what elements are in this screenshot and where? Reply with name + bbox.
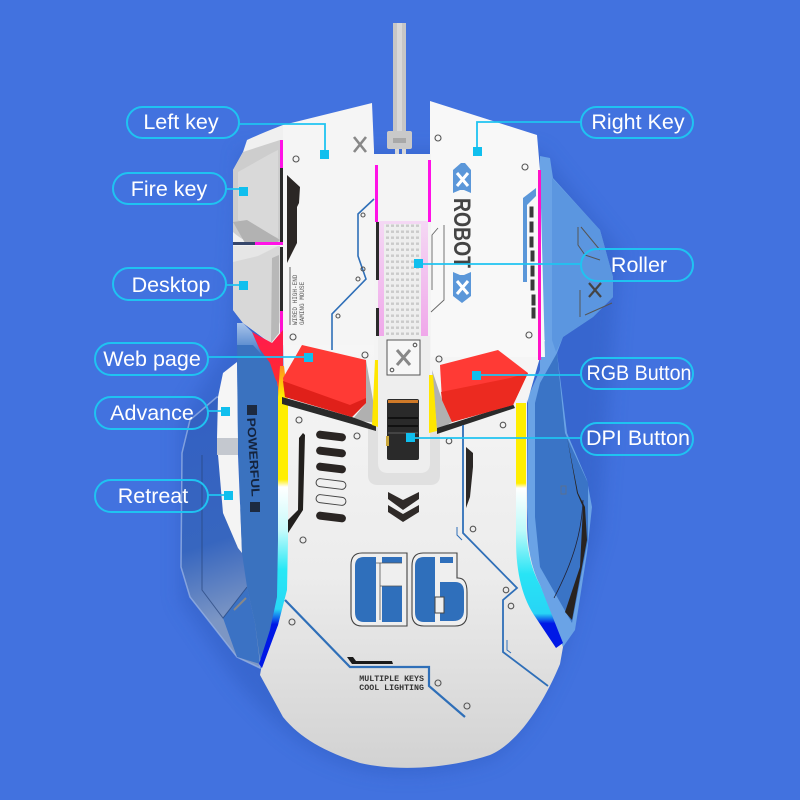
decal rule: [289, 267, 291, 325]
panel: red web page button: [282, 345, 378, 431]
vent slots: [316, 430, 346, 523]
centre DPI housing: [368, 336, 440, 485]
callout: Advance: [95, 397, 230, 429]
left key: [283, 103, 374, 345]
callout: Right Key: [473, 107, 693, 156]
blue circuit lines left key: [332, 199, 374, 350]
callout: Roller: [414, 249, 693, 281]
callout: DPI Button: [406, 423, 693, 455]
callout: Web page: Web page: [103, 347, 201, 371]
small text decal: WIRED HIGH-END: [292, 274, 299, 325]
left side upper shell: [233, 125, 283, 345]
panel: right RGB light strip: [516, 403, 563, 648]
POWERFUL X decal: [244, 405, 263, 512]
black decal left lower: [288, 433, 305, 533]
red left base: [252, 330, 283, 400]
right key: [430, 101, 545, 357]
panel: left blue strip: [237, 323, 278, 660]
blue circuit line lower left: [285, 600, 465, 717]
callout: Advance: Advance: [110, 401, 194, 425]
POWERFUL X decal: POWERFUL: [244, 417, 263, 497]
callout: Fire key: Fire key: [131, 177, 207, 201]
callout: Right Key: Right Key: [591, 110, 685, 134]
small text decal line two: GAMING MOUSE: [299, 281, 306, 325]
panel: main white shell: [260, 340, 563, 768]
callout: RGB Button: RGB Button: [586, 361, 692, 385]
callout: Left key: Left key: [143, 110, 219, 134]
panel: red RGB button: [429, 350, 528, 444]
advance side key: [217, 362, 238, 438]
black accent stroke: [347, 657, 393, 664]
blue circuit line lower right: [463, 425, 548, 686]
side key gap: [217, 438, 238, 455]
callout: Roller: Roller: [611, 253, 667, 277]
DPI button: [386, 399, 419, 460]
G6 logo: [351, 553, 467, 626]
ROBOT X decal: [448, 163, 475, 303]
callout: Desktop: Desktop: [132, 273, 210, 297]
right key vent decal: [523, 188, 536, 318]
black decal right lower: [466, 447, 473, 508]
panel: fire key: [233, 140, 280, 243]
centre channel: [372, 154, 436, 460]
lower shell screws: [289, 417, 514, 709]
panel: desktop key: [233, 246, 280, 343]
panel: right blue side wing: [527, 156, 613, 647]
icon: braided cable: [387, 23, 412, 155]
drop shadow of mouse: [180, 150, 620, 774]
callout: Desktop: [113, 268, 248, 300]
ROBOT X decal: ROBOT: [448, 198, 475, 268]
callout: Web page: [95, 343, 313, 375]
neon magenta strips: [233, 140, 541, 360]
right circuit lines by wheel: [431, 225, 444, 312]
black decal left key: [287, 175, 300, 263]
MULTIPLE KEYS text: MULTIPLE KEYS: [359, 675, 424, 684]
retreat side key: [218, 455, 242, 553]
left glow strip: [259, 366, 288, 668]
callout: DPI Button: DPI Button: [586, 426, 690, 450]
callout: Retreat: [95, 480, 233, 512]
screws left and right keys: [290, 135, 532, 362]
callout: Fire key: [113, 173, 248, 204]
callout: Left key: [127, 107, 329, 159]
icon: X logo left key: [354, 137, 366, 152]
callout: Retreat: Retreat: [118, 484, 188, 508]
icon: double chevrons: [388, 492, 419, 522]
small blue ticks: [457, 527, 511, 653]
panel: thumb loop: [181, 397, 260, 668]
scroll wheel: [376, 221, 428, 336]
COOL LIGHTING text: COOL LIGHTING: [359, 684, 424, 693]
callout: RGB Button: [472, 358, 693, 389]
